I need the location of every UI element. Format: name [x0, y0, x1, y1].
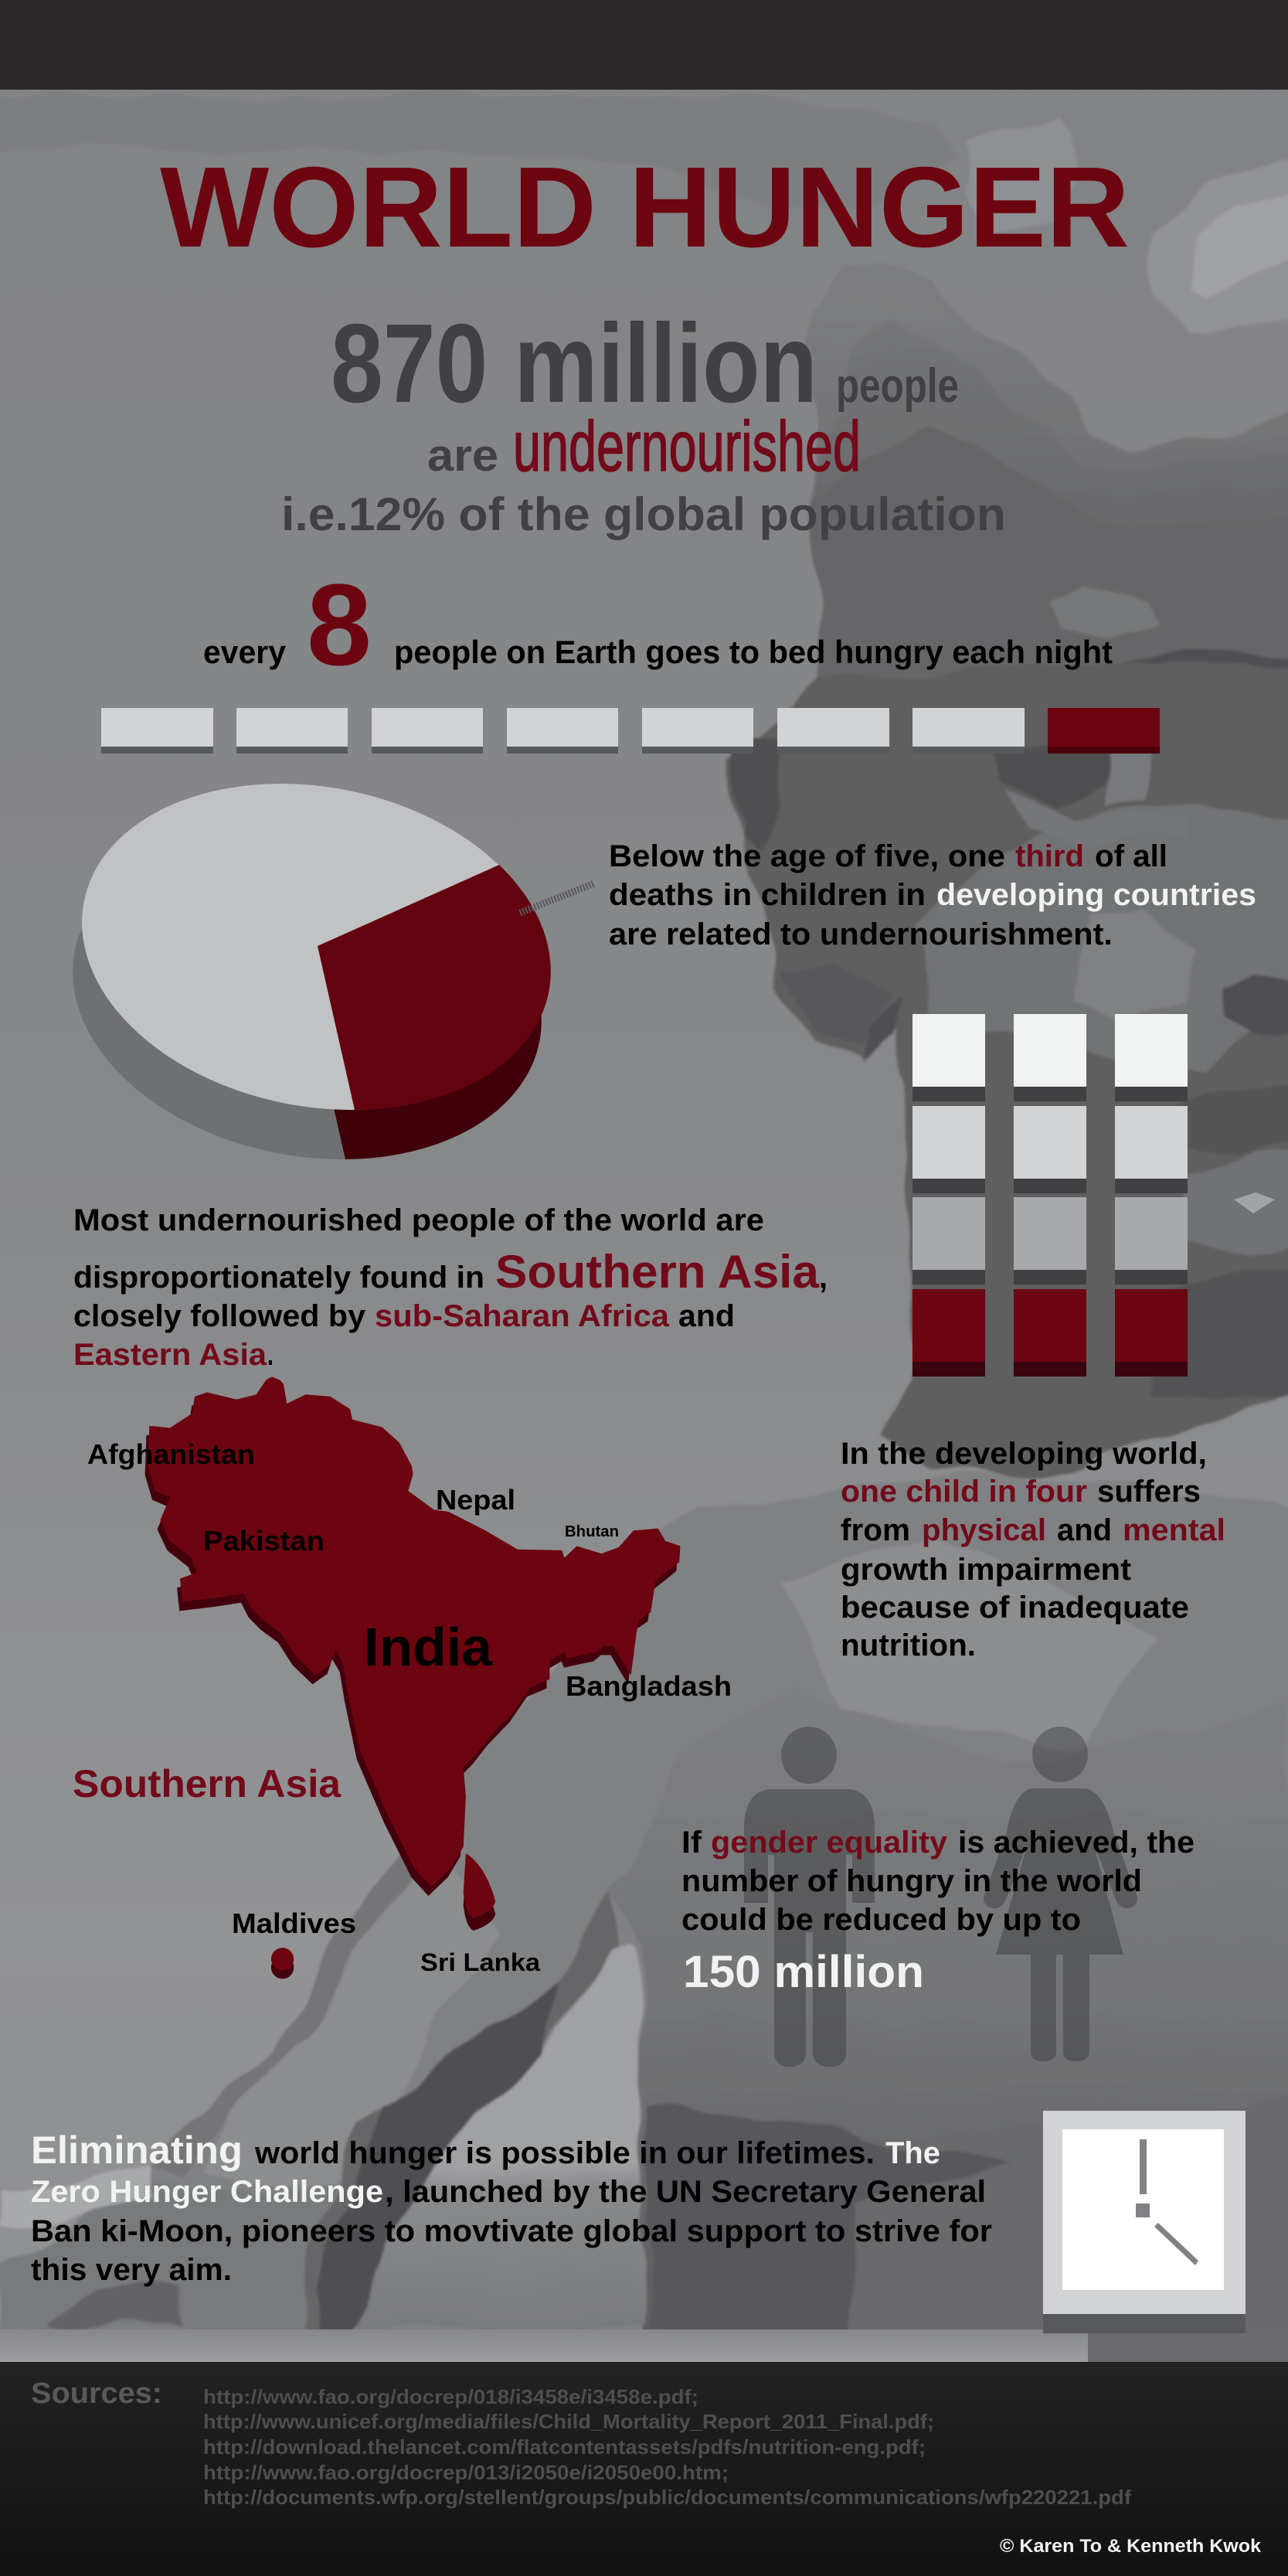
light spot near the eye: [1234, 1193, 1275, 1213]
text: eliminating world hunger: Ban ki-Moon, pioneers to movtivate global support to strive for: [31, 2214, 992, 2248]
sources: http://download.thelancet.com/flatcontentassets/pdfs/nutrition-eng.pdf;: [203, 2435, 926, 2459]
text: gender equality: [681, 1826, 1195, 1997]
3D pie chart: one third of child deaths: [44, 745, 579, 1198]
icon: man: [744, 1727, 875, 2067]
headline: are undernourished: [427, 407, 861, 486]
headline: are undernourished: undernourished: [513, 407, 861, 486]
text: eliminating world hunger: The: [885, 2136, 940, 2170]
footer band: [0, 2362, 1288, 2576]
sources: [31, 2377, 1131, 2509]
text: Southern Asia distribution: Southern Asia: [495, 1246, 820, 1298]
pie text: third: [1015, 839, 1084, 873]
one-in-eight blocks: [101, 708, 1160, 754]
credit: © Karen To & Kenneth Kwok: [1000, 2536, 1262, 2557]
map labels: Southern Asia: [73, 1762, 342, 1805]
text: eliminating world hunger: Zero Hunger Challenge: [31, 2175, 383, 2209]
pie text: developing countries: [936, 878, 1256, 912]
map labels: Bangladash: [566, 1670, 732, 1702]
sources: http://www.unicef.org/media/files/Child_Mortality_Report_2011_Final.pdf;: [203, 2410, 934, 2433]
pie text: deaths in children in: [609, 878, 926, 912]
title: WORLD HUNGER: [160, 144, 1130, 271]
text: Southern Asia distribution: disproportionately found in: [73, 1261, 484, 1295]
text: one child in four: because of inadequate: [841, 1591, 1189, 1625]
pie text: are related to undernourishment.: [609, 917, 1113, 951]
text: eliminating world hunger: world hunger is possible in our lifetimes.: [254, 2136, 875, 2170]
sources: http://www.fao.org/docrep/018/i3458e/i3458e.pdf;: [203, 2385, 698, 2408]
text: one child in four: one child in four: [841, 1475, 1087, 1509]
text: gender equality: could be reduced by up to: [681, 1903, 1081, 1937]
map labels: Nepal: [436, 1484, 515, 1516]
pie callout leader: [520, 883, 594, 913]
text: Southern Asia distribution: [73, 1203, 828, 1372]
sources: http://www.fao.org/docrep/013/i2050e/i2050e00.htm;: [203, 2461, 729, 2484]
text: one child in four: In the developing world,: [841, 1437, 1207, 1471]
stat: every 8 people: people on Earth goes to bed hungry each night: [394, 634, 1113, 670]
headline: are undernourished: are: [427, 430, 498, 481]
pie text: [609, 839, 1256, 951]
text: Southern Asia distribution: and: [678, 1299, 735, 1333]
top bar: [0, 0, 1288, 90]
stat: every 8 people: every: [203, 634, 287, 670]
text: one child in four: [841, 1437, 1225, 1662]
icon: clock: [1043, 2111, 1246, 2333]
text: one child in four: from: [841, 1513, 910, 1547]
text: one child in four: nutrition.: [841, 1628, 976, 1662]
text: one child in four: growth impairment: [841, 1553, 1131, 1587]
stat: every 8 people: 8: [307, 560, 372, 689]
text: one child in four: and: [1057, 1513, 1112, 1547]
text: Southern Asia distribution: Most undernourished people of the world are: [73, 1203, 764, 1237]
text: gender equality: is achieved, the: [958, 1826, 1195, 1860]
pie text: Below the age of five, one: [609, 839, 1005, 873]
map labels: Bhutan: [565, 1523, 619, 1540]
text: Southern Asia distribution: closely followed by: [73, 1299, 366, 1333]
dark leg shadow below clock: [1088, 2333, 1288, 2362]
text: one child in four: physical: [922, 1513, 1046, 1547]
pie text: of all: [1095, 839, 1167, 873]
headline: 12 percent of population: i.e.12% of the global population: [281, 488, 1006, 540]
map labels: Sri Lanka: [420, 1948, 540, 1976]
icon: woman: [984, 1727, 1137, 2061]
headline: 870 million people: people: [836, 359, 959, 413]
text: Southern Asia distribution: sub-Saharan Africa: [375, 1299, 670, 1333]
text: Southern Asia distribution: .: [267, 1338, 274, 1372]
text: gender equality: gender equality: [711, 1826, 948, 1860]
text: eliminating world hunger: Eliminating: [31, 2129, 243, 2172]
map of Southern Asia: [145, 1376, 680, 1979]
text: eliminating world hunger: [31, 2129, 992, 2287]
floor band: [0, 2329, 1088, 2362]
text: Southern Asia distribution: ,: [819, 1261, 828, 1295]
text: gender equality: If: [681, 1826, 702, 1860]
map labels: India: [364, 1617, 493, 1677]
block chart: one child in four: [912, 1014, 1188, 1376]
map labels: Pakistan: [203, 1525, 325, 1557]
text: eliminating world hunger: this very aim.: [31, 2253, 232, 2287]
text: Southern Asia distribution: Eastern Asia: [73, 1338, 267, 1372]
stat: every 8 people: [203, 560, 1113, 689]
text: eliminating world hunger: , launched by the UN Secretary General: [385, 2175, 986, 2209]
text: gender equality: 150 million: [683, 1947, 924, 1997]
text: gender equality: number of hungry in the world: [681, 1864, 1142, 1898]
map labels: Maldives: [232, 1907, 356, 1939]
headline: 870 million people: 870 million: [331, 301, 817, 426]
map labels: Afghanistan: [87, 1438, 255, 1470]
text: one child in four: suffers: [1097, 1475, 1201, 1509]
sources: Sources:: [31, 2377, 162, 2410]
sources: http://documents.wfp.org/stellent/groups/public/documents/communications/wfp220221.pdf: [203, 2486, 1131, 2509]
text: one child in four: mental: [1123, 1513, 1225, 1547]
map labels: [73, 1438, 732, 1976]
